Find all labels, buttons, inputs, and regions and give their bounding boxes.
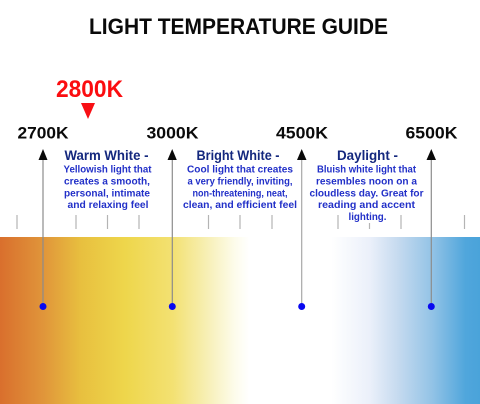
- arrow: 6500K marker: [426, 149, 436, 310]
- arrow: 2700K marker: [38, 149, 48, 310]
- text block: bright white: clean, and efficient feel: [183, 199, 297, 211]
- text block: warm white: personal, intimate: [64, 188, 150, 200]
- text block: daylight: Bluish white light that: [317, 164, 416, 176]
- text block: bright white: [183, 147, 297, 211]
- text block: warm white: [64, 147, 152, 211]
- text block: daylight: cloudless day. Great for: [310, 188, 424, 200]
- text block: warm white: creates a smooth,: [64, 176, 150, 188]
- text block: daylight: lighting.: [348, 211, 387, 223]
- colour temperature gradient band: [0, 237, 480, 404]
- arrow: 4500K marker: [297, 149, 306, 310]
- label: 3000K: 3000K: [146, 124, 199, 142]
- text block: daylight: resembles noon on a: [316, 176, 417, 188]
- text block: warm white: Yellowish light that: [64, 164, 152, 176]
- text block: bright white: non-threatening, neat,: [192, 188, 288, 200]
- text block: bright white: Cool light that creates: [187, 164, 293, 176]
- text block: warm white: Warm White -: [64, 147, 149, 163]
- text block: bright white: Bright White -: [196, 147, 280, 163]
- text block: bright white: a very friendly, inviting,: [188, 176, 293, 188]
- label: 2700K: 2700K: [18, 124, 69, 142]
- title: LIGHT TEMPERATURE GUIDE: [89, 14, 388, 39]
- text block: daylight: reading and accent: [318, 199, 416, 211]
- label: 4500K: 4500K: [276, 124, 329, 142]
- arrow: 3000K marker: [168, 149, 177, 310]
- red label: 2800K: 2800K: [56, 76, 124, 103]
- text block: daylight: [310, 147, 424, 223]
- label: 6500K: 6500K: [406, 124, 458, 142]
- text block: daylight: Daylight -: [337, 147, 398, 163]
- icon: red down triangle: [81, 103, 95, 119]
- text block: warm white: and relaxing feel: [68, 199, 149, 211]
